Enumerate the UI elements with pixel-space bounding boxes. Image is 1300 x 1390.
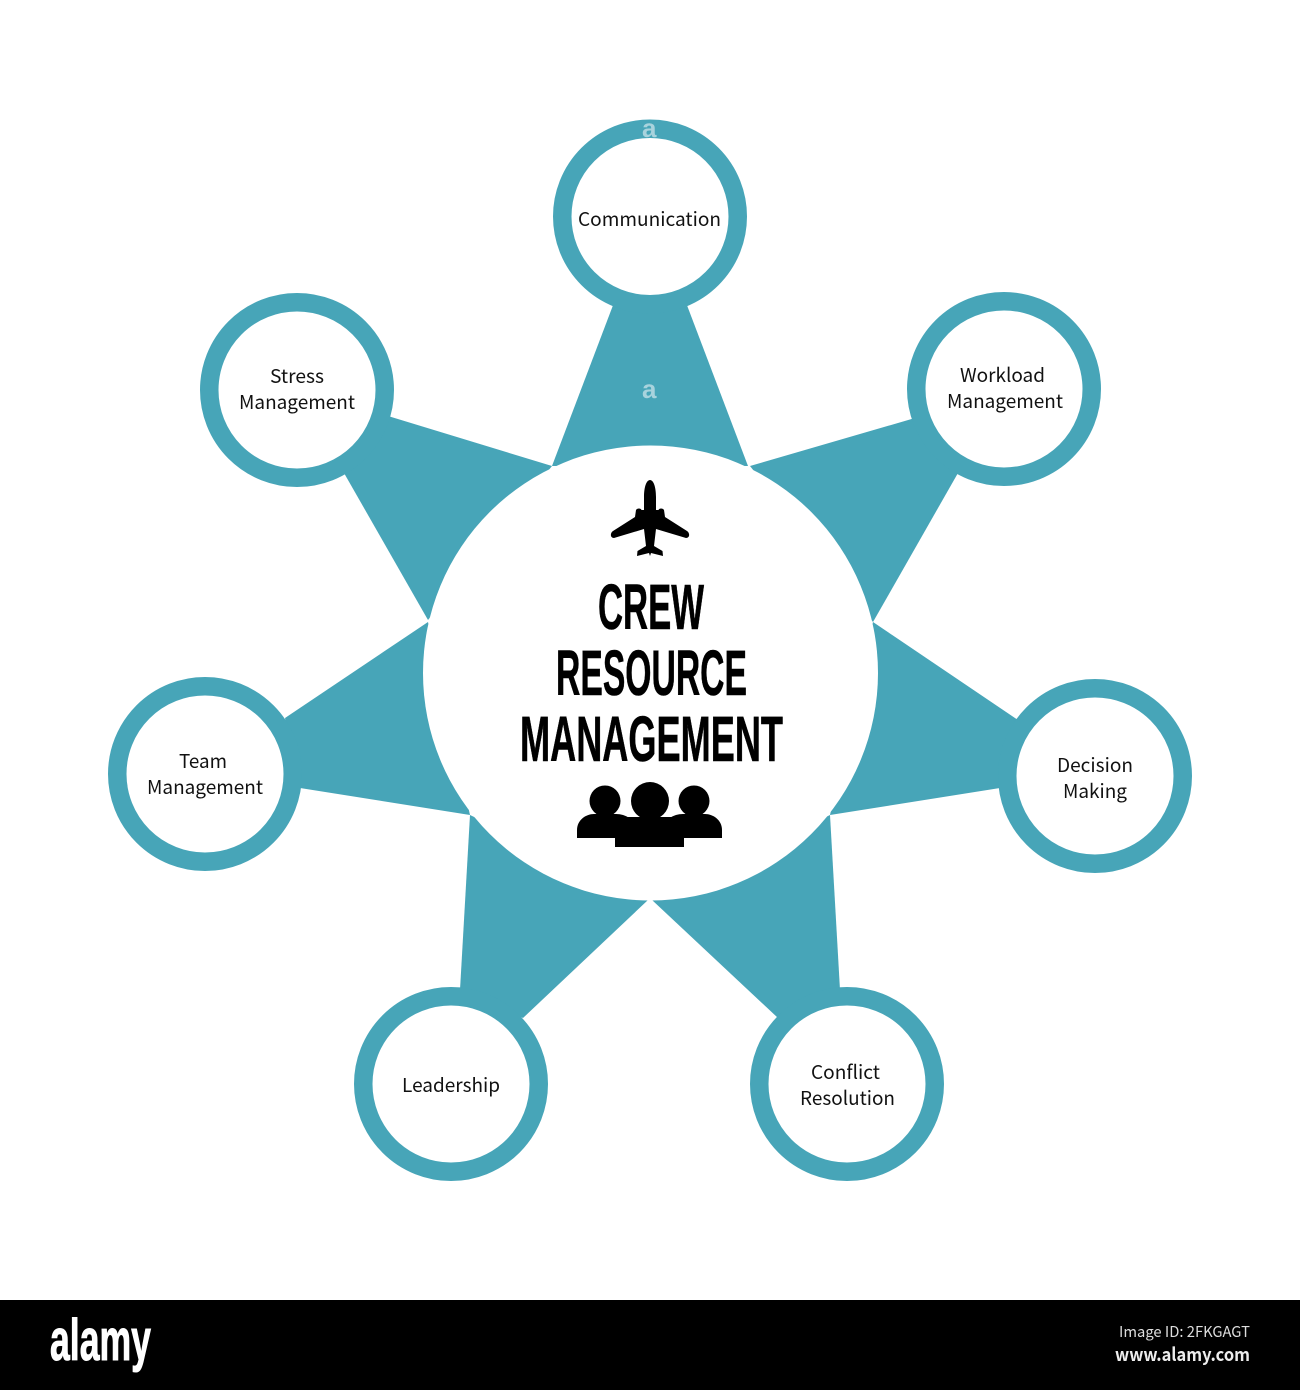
- watermark marks: a: [642, 113, 657, 143]
- node: conflict resolution: Conflict: [811, 1058, 880, 1085]
- node: decision making: Decision: [1057, 751, 1133, 778]
- node: workload management: [916, 301, 1092, 477]
- footer bar: www.alamy.com: [1115, 1341, 1250, 1367]
- icon: airplane: [611, 480, 689, 556]
- title: RESOURCE: [556, 637, 747, 709]
- footer bar: alamy: [50, 1308, 151, 1373]
- node: decision making: [1007, 688, 1183, 864]
- node: communication: [562, 129, 738, 304]
- icon: crew group: [577, 782, 722, 847]
- wedge: team management: [285, 622, 470, 815]
- node: stress management: Stress: [270, 362, 324, 389]
- wedge: stress management: [344, 416, 552, 620]
- title: MANAGEMENT: [520, 703, 783, 775]
- wedge: communication: [552, 300, 748, 466]
- center circle: [423, 446, 878, 900]
- node: communication: Communication: [578, 205, 721, 232]
- node: conflict resolution: [759, 996, 935, 1172]
- node: leadership: [363, 996, 539, 1172]
- title: [520, 571, 783, 775]
- footer bar: Image ID: 2FKGAGT: [1119, 1321, 1250, 1342]
- wedge: leadership: [460, 815, 648, 1018]
- watermark marks: [642, 113, 657, 404]
- node: workload management: Management: [947, 387, 1063, 414]
- node: stress management: [209, 302, 385, 478]
- footer bar: [0, 1300, 1300, 1390]
- wedge: workload management: [750, 418, 958, 622]
- title: CREW: [598, 571, 704, 643]
- node: stress management: Management: [239, 388, 355, 415]
- node: team management: Management: [147, 773, 263, 800]
- node: workload management: Workload: [960, 361, 1045, 388]
- node: leadership: Leadership: [402, 1071, 500, 1098]
- node: conflict resolution: Resolution: [800, 1084, 895, 1111]
- wedge: decision making: [830, 622, 1018, 815]
- wedge: conflict resolution: [652, 815, 840, 1018]
- watermark marks: a: [642, 374, 657, 404]
- node: team management: [117, 686, 293, 862]
- node: team management: Team: [179, 747, 227, 774]
- node: decision making: Making: [1063, 777, 1127, 804]
